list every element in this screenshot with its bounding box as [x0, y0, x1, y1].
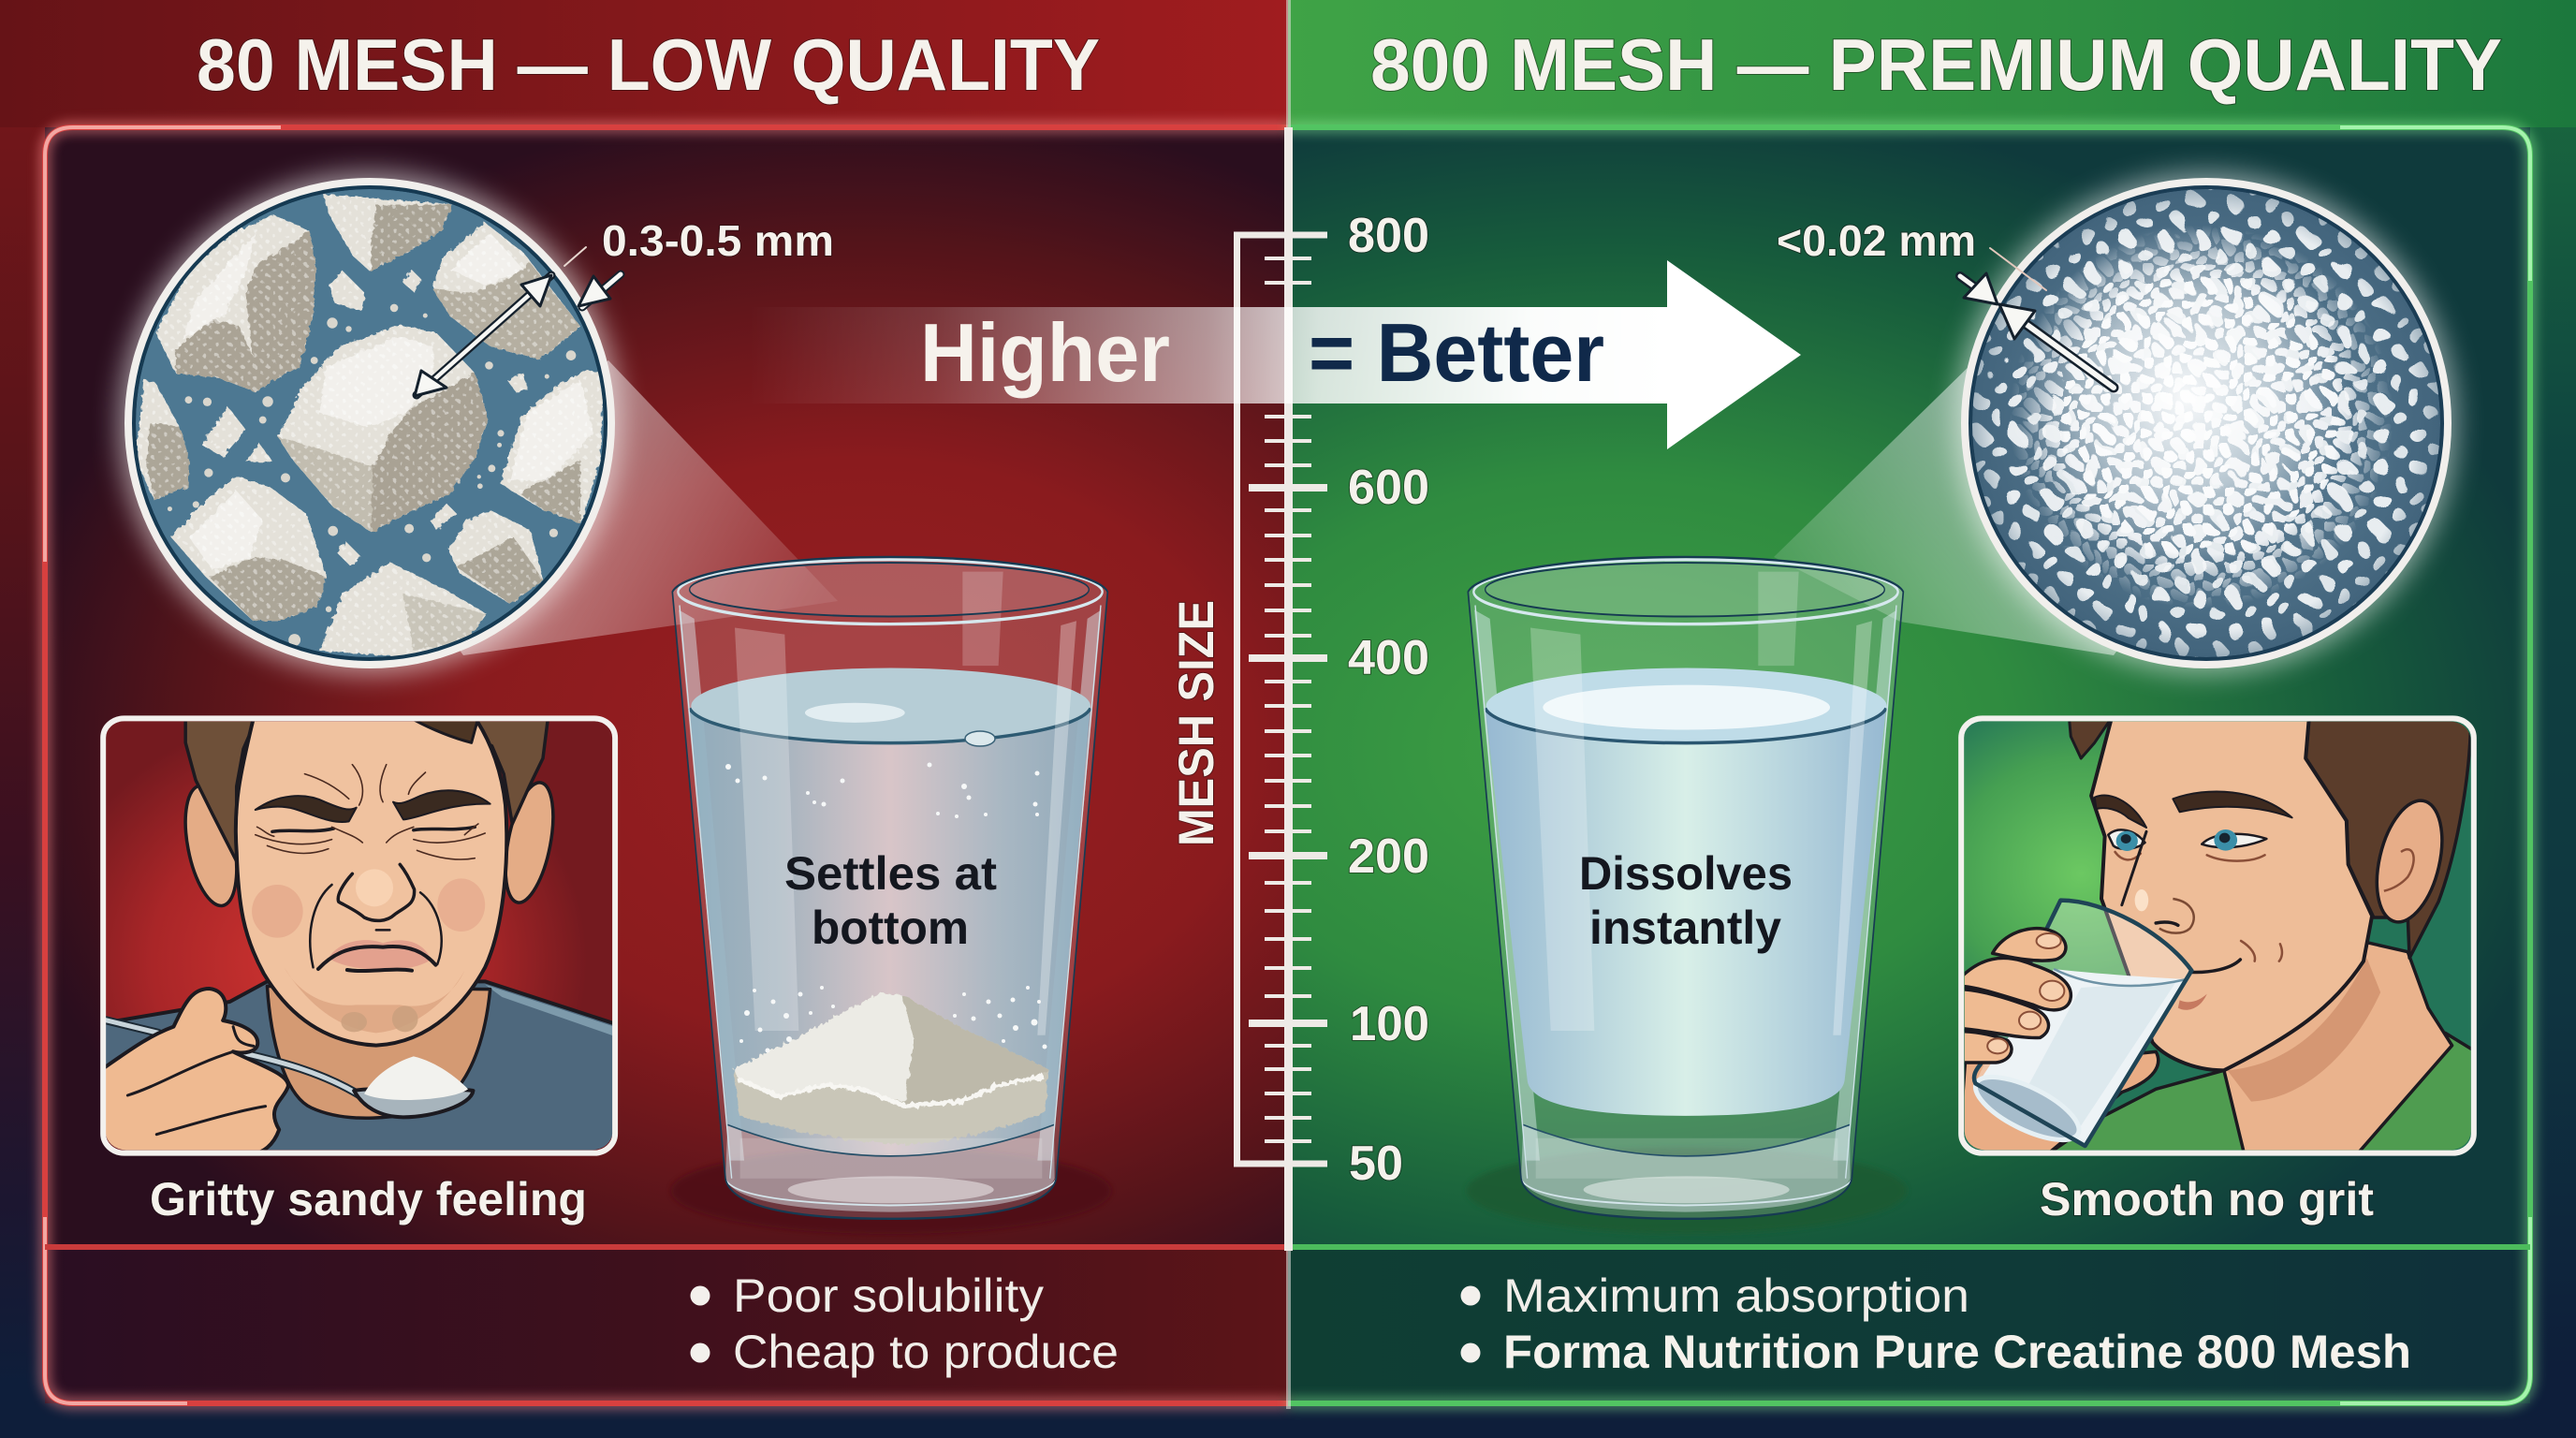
- water surface front edge: [690, 709, 1090, 743]
- bullet: cheap to produce: Cheap to produce: [733, 1326, 1119, 1378]
- hand holding spoon: [100, 989, 288, 1154]
- neck: [267, 986, 490, 1118]
- lens ring: [1961, 178, 2452, 668]
- panel interior: left: [45, 127, 1288, 1247]
- powder on spoon: [364, 1056, 468, 1100]
- ruler value labels: 100: [1350, 997, 1429, 1051]
- loose fragments: [168, 304, 576, 646]
- forelock: [410, 718, 478, 742]
- glass shell: [1468, 557, 1903, 1219]
- ruler value labels: 200: [1348, 829, 1429, 884]
- chin irritation: [341, 1005, 418, 1032]
- ruler value labels: [1348, 209, 1429, 1191]
- nose: [2122, 831, 2194, 933]
- panel: 80 mesh low quality: [0, 0, 1288, 1403]
- drinking glass: [1966, 901, 2191, 1152]
- ear: [2366, 795, 2452, 928]
- cloudy water: [690, 709, 1090, 1156]
- lens interior: [1969, 185, 2444, 661]
- wrinkles: [256, 765, 485, 859]
- bottom band: left: [45, 1249, 1288, 1403]
- arrow shape: [749, 260, 1801, 449]
- bottom band: right: [1288, 1249, 2530, 1403]
- scattered outer grains: [1972, 189, 2439, 657]
- water surface: [1486, 668, 1887, 744]
- dense powder pile: [2012, 227, 2391, 605]
- ruler bracket: [1237, 235, 1327, 1164]
- glass: dissolves instantly: [1468, 557, 1903, 1219]
- measurement arrows: particle size: [415, 247, 621, 396]
- glass label: dissolves instantly: Dissolves: [1579, 847, 1793, 900]
- water surface: [691, 668, 1090, 744]
- clear water: [1486, 709, 1886, 1116]
- surface ripple: [1543, 685, 1830, 730]
- lower hand palm: [1958, 1051, 2159, 1154]
- bullet list: low quality drawbacks: [691, 1269, 1119, 1378]
- surface bubble: [965, 731, 995, 746]
- spoon bowl: [354, 1089, 473, 1117]
- zoom cone: left: [370, 360, 838, 655]
- under eye lines: [2115, 852, 2282, 961]
- heading: 80 mesh: 80 MESH — LOW QUALITY: [197, 23, 1100, 106]
- card background: [103, 718, 615, 1153]
- shirt: [2047, 1033, 2476, 1154]
- ruler value labels: 600: [1348, 461, 1429, 515]
- card border: [103, 718, 615, 1153]
- right eyebrow: [2173, 791, 2292, 817]
- shirt: [100, 981, 614, 1154]
- bullet: poor solubility: Poor solubility: [733, 1269, 1044, 1322]
- bullet: forma nutrition product: Forma Nutrition Pure Creatine 800 Mesh: [1503, 1326, 2411, 1378]
- ruler value labels: 50: [1349, 1137, 1403, 1191]
- gripping fingers: [1958, 929, 2071, 1063]
- spoon handle shine: [100, 1019, 362, 1097]
- face: [2091, 718, 2372, 1070]
- nasolabial folds: [310, 885, 442, 967]
- arrow text: higher: Higher: [920, 306, 1170, 399]
- glass body: [1468, 557, 1903, 1219]
- smile: [2190, 960, 2240, 972]
- centre divider line: [1286, 0, 1291, 1409]
- right ear: [505, 781, 555, 904]
- card border: [1961, 718, 2474, 1153]
- arrow text: better: = Better: [1309, 306, 1604, 399]
- major ticks: [1249, 484, 1327, 1027]
- glass label: settles at bottom: Settles at: [784, 847, 997, 900]
- left ear: [183, 785, 237, 908]
- right hair: [434, 718, 548, 824]
- callout: higher equals better arrow: [749, 260, 1801, 449]
- glass shell: [672, 557, 1107, 1219]
- glass label: settles at bottom: [784, 847, 997, 954]
- heading: 800 mesh: 800 MESH — PREMIUM QUALITY: [1370, 23, 2502, 106]
- left eyebrow: [256, 796, 357, 822]
- right eye: [2202, 829, 2266, 851]
- crystal chunks: [136, 194, 604, 657]
- glass label: dissolves instantly: [1579, 847, 1793, 954]
- bullet list: premium benefits: [1460, 1269, 2411, 1378]
- left eye: [2108, 829, 2145, 851]
- glass label: dissolves instantly: instantly: [1589, 902, 1781, 954]
- water surface front edge: [1486, 709, 1886, 743]
- settled powder mound: [733, 992, 1048, 1145]
- label: particle size 0.3-0.5 mm: 0.3-0.5 mm: [602, 216, 834, 265]
- chunk highlights: [183, 233, 593, 570]
- magnifier: coarse 80 mesh powder: [119, 172, 834, 674]
- left outer background: [0, 0, 1288, 1414]
- lens glow: [1955, 172, 2457, 674]
- ruler spine: [1284, 127, 1293, 1251]
- spoon handle: [100, 1019, 362, 1097]
- coarse crystals: [136, 189, 604, 657]
- cheek shading: [252, 885, 303, 938]
- frame: right glowing border: [1288, 127, 2530, 1403]
- neck: [2224, 943, 2452, 1154]
- heading band: right: [1288, 0, 2576, 127]
- zoom cone: right: [1774, 360, 2209, 655]
- lens ring: [124, 178, 615, 668]
- magnifier: fine 800 mesh powder: [1777, 150, 2481, 693]
- panel interior: right: [1288, 127, 2530, 1247]
- frowning mouth: [318, 940, 435, 971]
- glass body: [672, 557, 1107, 1219]
- measurement arrows: particle size: [1960, 248, 2114, 388]
- face: [236, 718, 506, 1046]
- ruler value labels: 400: [1348, 631, 1429, 685]
- lower lip: [2178, 994, 2207, 1010]
- panel: 800 mesh premium quality: [1288, 0, 2576, 1403]
- lens interior: [132, 185, 607, 661]
- minor ticks: [1265, 257, 1311, 1143]
- glass: settles at bottom: [672, 557, 1107, 1219]
- axis label: mesh size: MESH SIZE: [1169, 600, 1224, 846]
- heading band: left: [0, 0, 1288, 127]
- left hair: [185, 718, 257, 861]
- glass label: settles at bottom: bottom: [812, 902, 969, 954]
- shirt shoulder light: [485, 985, 614, 1036]
- caption: gritty sandy feeling: Gritty sandy feeling: [150, 1173, 587, 1225]
- glass shadow: left: [671, 1148, 1111, 1234]
- card: man drinking smooth creatine: [1958, 718, 2476, 1154]
- label: particle size under 0.02 mm: <0.02 mm: [1777, 216, 1976, 265]
- ruler value labels: 800: [1348, 209, 1429, 263]
- left eyebrow: [2095, 795, 2146, 828]
- suspended particles: [725, 762, 1046, 1052]
- chart: mesh size ruler: [1169, 127, 1429, 1251]
- right outer background: [1288, 0, 2576, 1414]
- closed eyes: [272, 827, 475, 831]
- card background: [1961, 718, 2474, 1153]
- surface foam: [805, 703, 905, 723]
- nose: [338, 864, 415, 920]
- hair front wisp: [2069, 718, 2112, 758]
- lens glow: [119, 172, 621, 674]
- caption: smooth no grit: Smooth no grit: [2040, 1173, 2374, 1225]
- bright powder core: [2022, 225, 2349, 571]
- bullet: maximum absorption: Maximum absorption: [1503, 1269, 1969, 1322]
- hair back: [2305, 718, 2471, 958]
- glass shadow: right: [1467, 1148, 1907, 1234]
- neck shadow: [2228, 958, 2380, 1102]
- card: man grimacing at gritty powder: [100, 718, 615, 1154]
- right eyebrow: [393, 790, 490, 819]
- fingernails: [1987, 933, 2064, 1053]
- frame: left glowing border: [45, 127, 1288, 1403]
- fine powder particles: [1972, 189, 2440, 657]
